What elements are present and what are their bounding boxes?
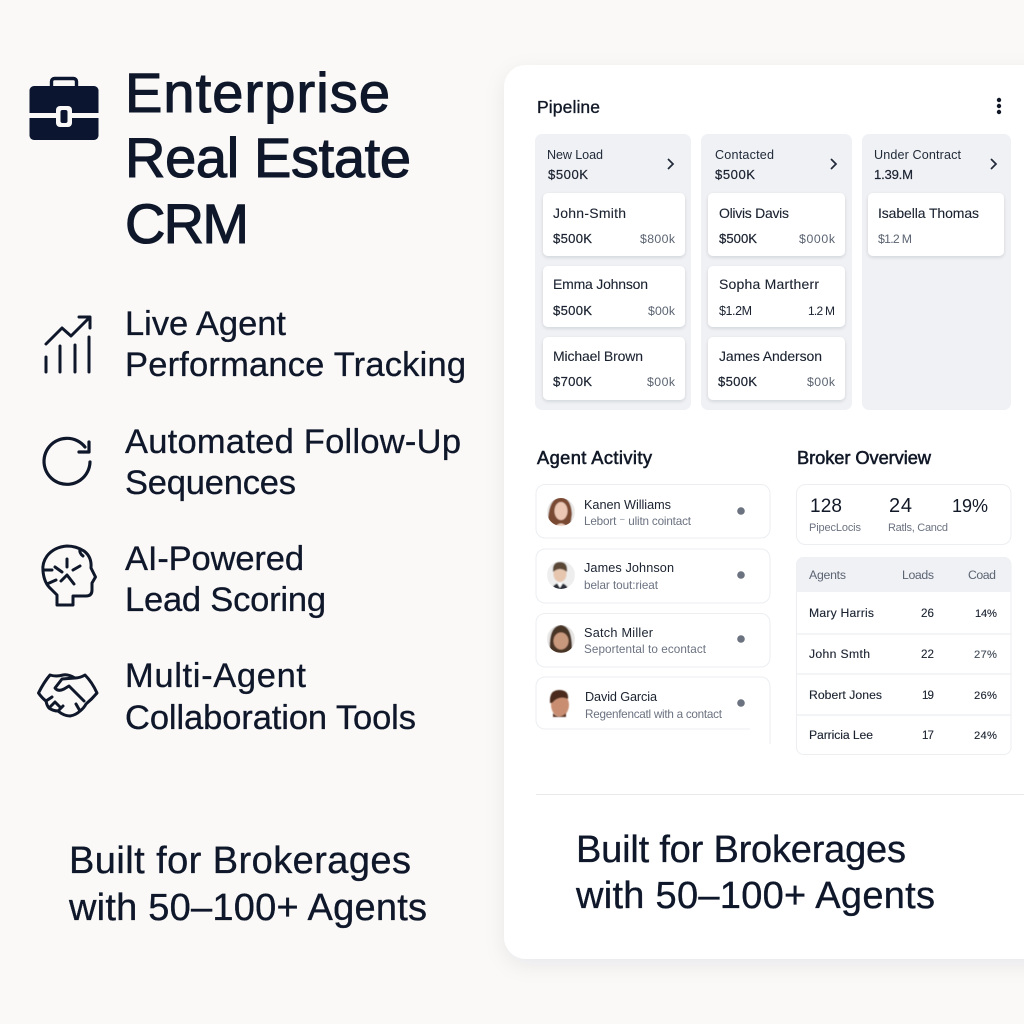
icon: handshake bbox=[38, 675, 97, 716]
deal card: James Anderson bbox=[708, 337, 845, 400]
broker stats box: 19% bbox=[952, 496, 988, 516]
pipeline column: new load bbox=[535, 134, 691, 410]
pipeline column: contacted: $500K bbox=[715, 167, 755, 182]
deal card: James Anderson: $500K bbox=[718, 374, 757, 389]
deal card: Emma Johnson: $500K bbox=[553, 303, 592, 318]
footer tagline right: with 50–100+ Agents bbox=[575, 875, 935, 917]
table row: John Smth: 27% bbox=[974, 649, 997, 661]
table row: Mary Harris bbox=[809, 606, 997, 620]
pipeline column: under contract bbox=[862, 134, 1011, 410]
feature: automated follow-up sequences: Automated Follow-Up bbox=[125, 423, 461, 461]
title bbox=[125, 61, 411, 255]
deal card: Sopha Martherr: 1.2 M bbox=[808, 304, 835, 318]
icon: refresh arrow bbox=[44, 438, 90, 484]
deal card: Emma Johnson: $00k bbox=[648, 304, 676, 318]
deal card: Olivis Davis: Olivis Davis bbox=[719, 205, 789, 221]
activity row: James Johnson: James Johnson bbox=[584, 561, 674, 575]
heading: agent activity: Agent Activity bbox=[537, 447, 653, 468]
activity row: Kanen Williams: Kanen Williams bbox=[584, 498, 671, 512]
deal card: Sopha Martherr: $1.2M bbox=[719, 304, 752, 318]
table row: Mary Harris: Mary Harris bbox=[809, 606, 874, 620]
heading: broker overview: Broker Overview bbox=[797, 447, 932, 468]
table row: Parricia Lee: 24% bbox=[974, 730, 997, 742]
activity row: James Johnson: belar tout:rieat bbox=[584, 579, 659, 592]
avatar: Satch Miller bbox=[547, 625, 575, 653]
deal card: Isabella Thomas: Isabella Thomas bbox=[878, 205, 979, 221]
feature: AI-powered lead scoring bbox=[125, 540, 326, 619]
footer tagline left: with 50–100+ Agents bbox=[68, 887, 427, 929]
table row: Parricia Lee: 17 bbox=[922, 729, 934, 742]
deal card: Isabella Thomas: $1.2 M bbox=[878, 232, 912, 246]
title: CRM bbox=[125, 192, 249, 255]
activity row: Satch Miller: Seportental to econtact bbox=[584, 643, 707, 656]
pipeline column: contacted: Contacted bbox=[715, 148, 774, 162]
table row: Robert Jones: Robert Jones bbox=[809, 688, 882, 702]
activity row: Kanen Williams bbox=[536, 484, 770, 538]
deal card: Michael Brown bbox=[543, 337, 685, 400]
footer tagline right bbox=[575, 829, 935, 917]
table row: Robert Jones: 19 bbox=[922, 689, 934, 702]
panel: CRM dashboard card bbox=[504, 65, 1024, 959]
footer tagline right: Built for Brokerages bbox=[576, 829, 906, 871]
broker stats box: 128 bbox=[810, 496, 842, 517]
deal card: James Anderson: James Anderson bbox=[719, 348, 822, 364]
broker stats box bbox=[796, 484, 1011, 544]
deal card: Emma Johnson: Emma Johnson bbox=[553, 276, 648, 292]
deal card: John-Smith: $500K bbox=[553, 231, 592, 246]
broker stats box: 24 bbox=[889, 495, 912, 517]
deal card: Michael Brown: Michael Brown bbox=[553, 348, 643, 364]
footer tagline left: Built for Brokerages bbox=[69, 840, 411, 882]
feature: live agent performance tracking: Live Agent bbox=[125, 305, 286, 343]
table row: John Smth bbox=[809, 647, 997, 661]
activity row: David Garcia bbox=[536, 677, 770, 744]
feature: multi-agent collaboration tools bbox=[125, 657, 416, 737]
feature: multi-agent collaboration tools: Collaboration Tools bbox=[125, 699, 416, 737]
icon: briefcase bbox=[30, 78, 98, 140]
agent table: Coad bbox=[968, 568, 996, 582]
deal card: John-Smith bbox=[543, 193, 685, 256]
activity row: David Garcia: David Garcia bbox=[585, 690, 658, 704]
deal card: John-Smith: $800k bbox=[640, 232, 676, 246]
feature: AI-powered lead scoring: Lead Scoring bbox=[125, 581, 326, 619]
table row: Mary Harris: 14% bbox=[975, 608, 997, 620]
heading: pipeline: Pipeline bbox=[537, 97, 600, 117]
avatar: Kanen Williams bbox=[547, 497, 575, 528]
deal card: Isabella Thomas bbox=[868, 193, 1004, 256]
deal card: Sopha Martherr: Sopha Martherr bbox=[719, 276, 819, 292]
deal card: Michael Brown: $00k bbox=[647, 375, 676, 389]
pipeline column: new load: $500K bbox=[548, 167, 588, 182]
agent table bbox=[796, 558, 1011, 754]
icon: AI head bbox=[43, 546, 96, 605]
feature: AI-powered lead scoring: AI-Powered bbox=[125, 540, 304, 578]
avatar: James Johnson bbox=[547, 561, 575, 590]
deal card: Olivis Davis: $000k bbox=[799, 232, 836, 246]
deal card: Emma Johnson bbox=[543, 266, 685, 327]
activity row: David Garcia: Regenfencatl with a contact bbox=[585, 708, 723, 721]
feature: multi-agent collaboration tools: Multi-Agent bbox=[125, 657, 306, 695]
deal card: Olivis Davis: $500K bbox=[719, 231, 757, 246]
feature: automated follow-up sequences: Sequences bbox=[125, 464, 296, 502]
activity row: James Johnson bbox=[536, 549, 770, 603]
feature: automated follow-up sequences bbox=[125, 423, 461, 502]
avatar: David Garcia bbox=[550, 690, 569, 717]
pipeline column: contacted bbox=[701, 134, 852, 410]
pipeline column: under contract: Under Contract bbox=[874, 148, 962, 162]
table row: Parricia Lee bbox=[809, 728, 997, 742]
agent table: Loads bbox=[902, 568, 934, 582]
deal card: John-Smith: John-Smith bbox=[553, 205, 626, 221]
table row: Mary Harris: 26 bbox=[921, 607, 934, 620]
pipeline column: under contract: 1.39.M bbox=[874, 167, 913, 182]
icon: rising chart bbox=[46, 317, 90, 372]
broker stats box: PipecLocis bbox=[809, 522, 862, 534]
deal card: James Anderson: $00k bbox=[807, 375, 836, 389]
table row: John Smth: John Smth bbox=[809, 647, 870, 661]
feature: live agent performance tracking: Performance Tracking bbox=[125, 346, 466, 384]
title: Enterprise bbox=[125, 61, 390, 124]
deal card: Michael Brown: $700K bbox=[553, 374, 592, 389]
table row: Robert Jones bbox=[809, 688, 997, 702]
broker stats box: Ratls, Cancd bbox=[888, 522, 948, 534]
table row: Parricia Lee: Parricia Lee bbox=[809, 728, 873, 742]
activity row: Satch Miller: Satch Miller bbox=[584, 626, 654, 640]
deal card: Olivis Davis bbox=[708, 193, 845, 256]
agent table: Agents bbox=[809, 568, 846, 582]
table row: John Smth: 22 bbox=[921, 648, 934, 661]
title: Real Estate bbox=[125, 126, 411, 189]
deal card: Sopha Martherr bbox=[708, 266, 845, 327]
footer tagline left bbox=[68, 840, 427, 929]
feature: live agent performance tracking bbox=[125, 305, 466, 384]
pipeline column: new load: New Load bbox=[547, 148, 603, 162]
activity row: Kanen Williams: Lebort ⁻ ulitn cointact bbox=[584, 515, 692, 528]
icon: more menu bbox=[997, 98, 1001, 114]
activity row: Satch Miller bbox=[536, 614, 770, 667]
table row: Robert Jones: 26% bbox=[974, 690, 997, 702]
